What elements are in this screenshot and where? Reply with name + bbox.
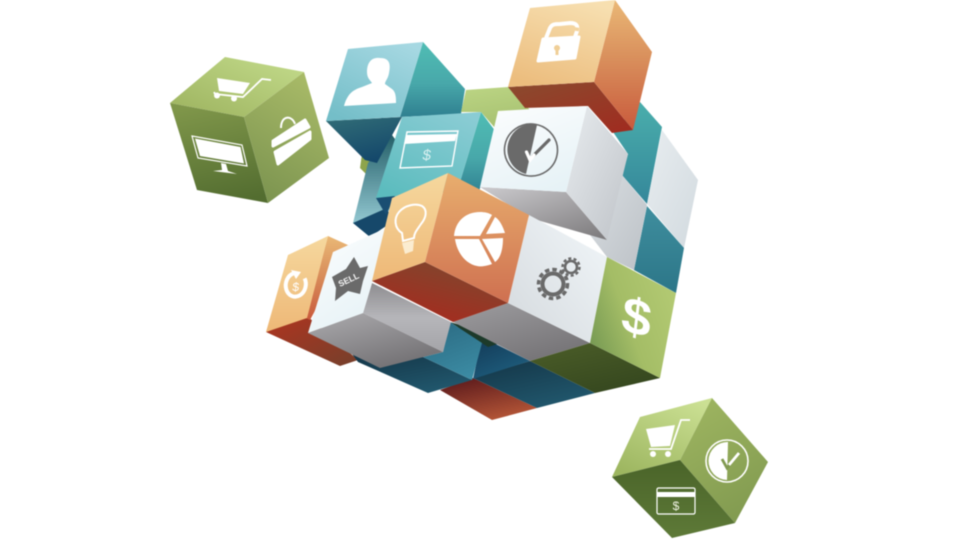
person cube underside [326, 117, 402, 163]
icon: pie chart [454, 212, 505, 266]
back cube: bottom teal face [473, 361, 595, 408]
dollar orange cube [266, 236, 358, 366]
back cube: navy inner face [453, 323, 530, 379]
card cube front face [376, 112, 481, 198]
lock cube underside [508, 82, 633, 133]
icon: open padlock [538, 23, 579, 61]
clock cube [480, 106, 628, 240]
icon: star with SELL label: SELL [337, 271, 361, 289]
gear cube underside [453, 303, 590, 361]
lock cube right face [594, 0, 652, 130]
sell cube right face [363, 283, 451, 352]
dollar green front face [590, 257, 676, 378]
gear cube front face [508, 215, 607, 343]
sell cube front face [308, 228, 386, 333]
icon: person silhouette [344, 58, 396, 106]
lock cube [508, 0, 652, 133]
back cube: right teal face upper [613, 102, 662, 204]
icon: half-filled clock with check [706, 440, 748, 482]
dollar cube right face [306, 236, 350, 320]
icon: dollar sign: $ [619, 285, 655, 350]
icon: briefcase [273, 118, 310, 164]
gear cube [453, 215, 607, 361]
icon: credit card: $ [421, 147, 433, 164]
back cube: light grey side face [590, 175, 647, 270]
person cube front face [326, 42, 423, 121]
icon: dollar refresh circle: $ [292, 280, 300, 294]
back cube: dark green shadow [450, 322, 510, 347]
back cube: person cube [326, 42, 465, 163]
icon: gears [538, 258, 580, 298]
icon: credit card [657, 488, 695, 514]
orange cube underside [372, 262, 508, 322]
left cube right face [244, 72, 329, 203]
dollar green underside [530, 343, 660, 393]
lower dark teal face [352, 354, 472, 393]
orange cube right face [425, 173, 529, 303]
dollar cube underside [266, 316, 358, 366]
bottom cube top face [612, 398, 712, 477]
floating green cube: top left [170, 57, 329, 203]
icon: half-filled clock with check [500, 120, 562, 180]
dollar cube front face [266, 236, 328, 332]
clock cube underside [480, 187, 607, 240]
back cube: lower-left teal block [353, 135, 414, 237]
left cube top face [170, 57, 304, 117]
orange cube left face [372, 173, 448, 281]
cluster: central cube assembly [266, 0, 698, 420]
left cube left face [170, 103, 268, 203]
icon: light bulb [396, 205, 426, 254]
back cube: right teal face lower [634, 206, 684, 293]
lock cube front face [508, 0, 615, 87]
lower mid teal face [423, 322, 482, 380]
card cube right face [457, 112, 496, 195]
card cube underside corner [376, 196, 395, 215]
lower teal blocks [352, 322, 482, 393]
icon: monitor [192, 136, 247, 174]
floating green cube: bottom right [612, 398, 768, 538]
back cube: right white face [647, 130, 698, 248]
dollar green cube [530, 257, 676, 393]
icon: shopping cart [214, 78, 271, 102]
bottom cube right face [680, 398, 768, 523]
sell cube underside [308, 313, 443, 368]
clock cube right face [566, 106, 628, 240]
clock cube front face [480, 106, 587, 192]
icon: shopping cart [646, 420, 690, 457]
idea and chart orange cube [372, 173, 529, 322]
icon: star with SELL label [332, 257, 368, 301]
person cube right face [400, 42, 465, 117]
sell cube [308, 228, 451, 368]
icon: credit card: $ [673, 499, 680, 513]
back cube: green sliver face [461, 87, 532, 128]
card cube [376, 112, 496, 215]
bottom cube lower face [612, 460, 735, 538]
back cube: bottom red face [440, 378, 537, 420]
back cube: small green corner [360, 154, 386, 178]
